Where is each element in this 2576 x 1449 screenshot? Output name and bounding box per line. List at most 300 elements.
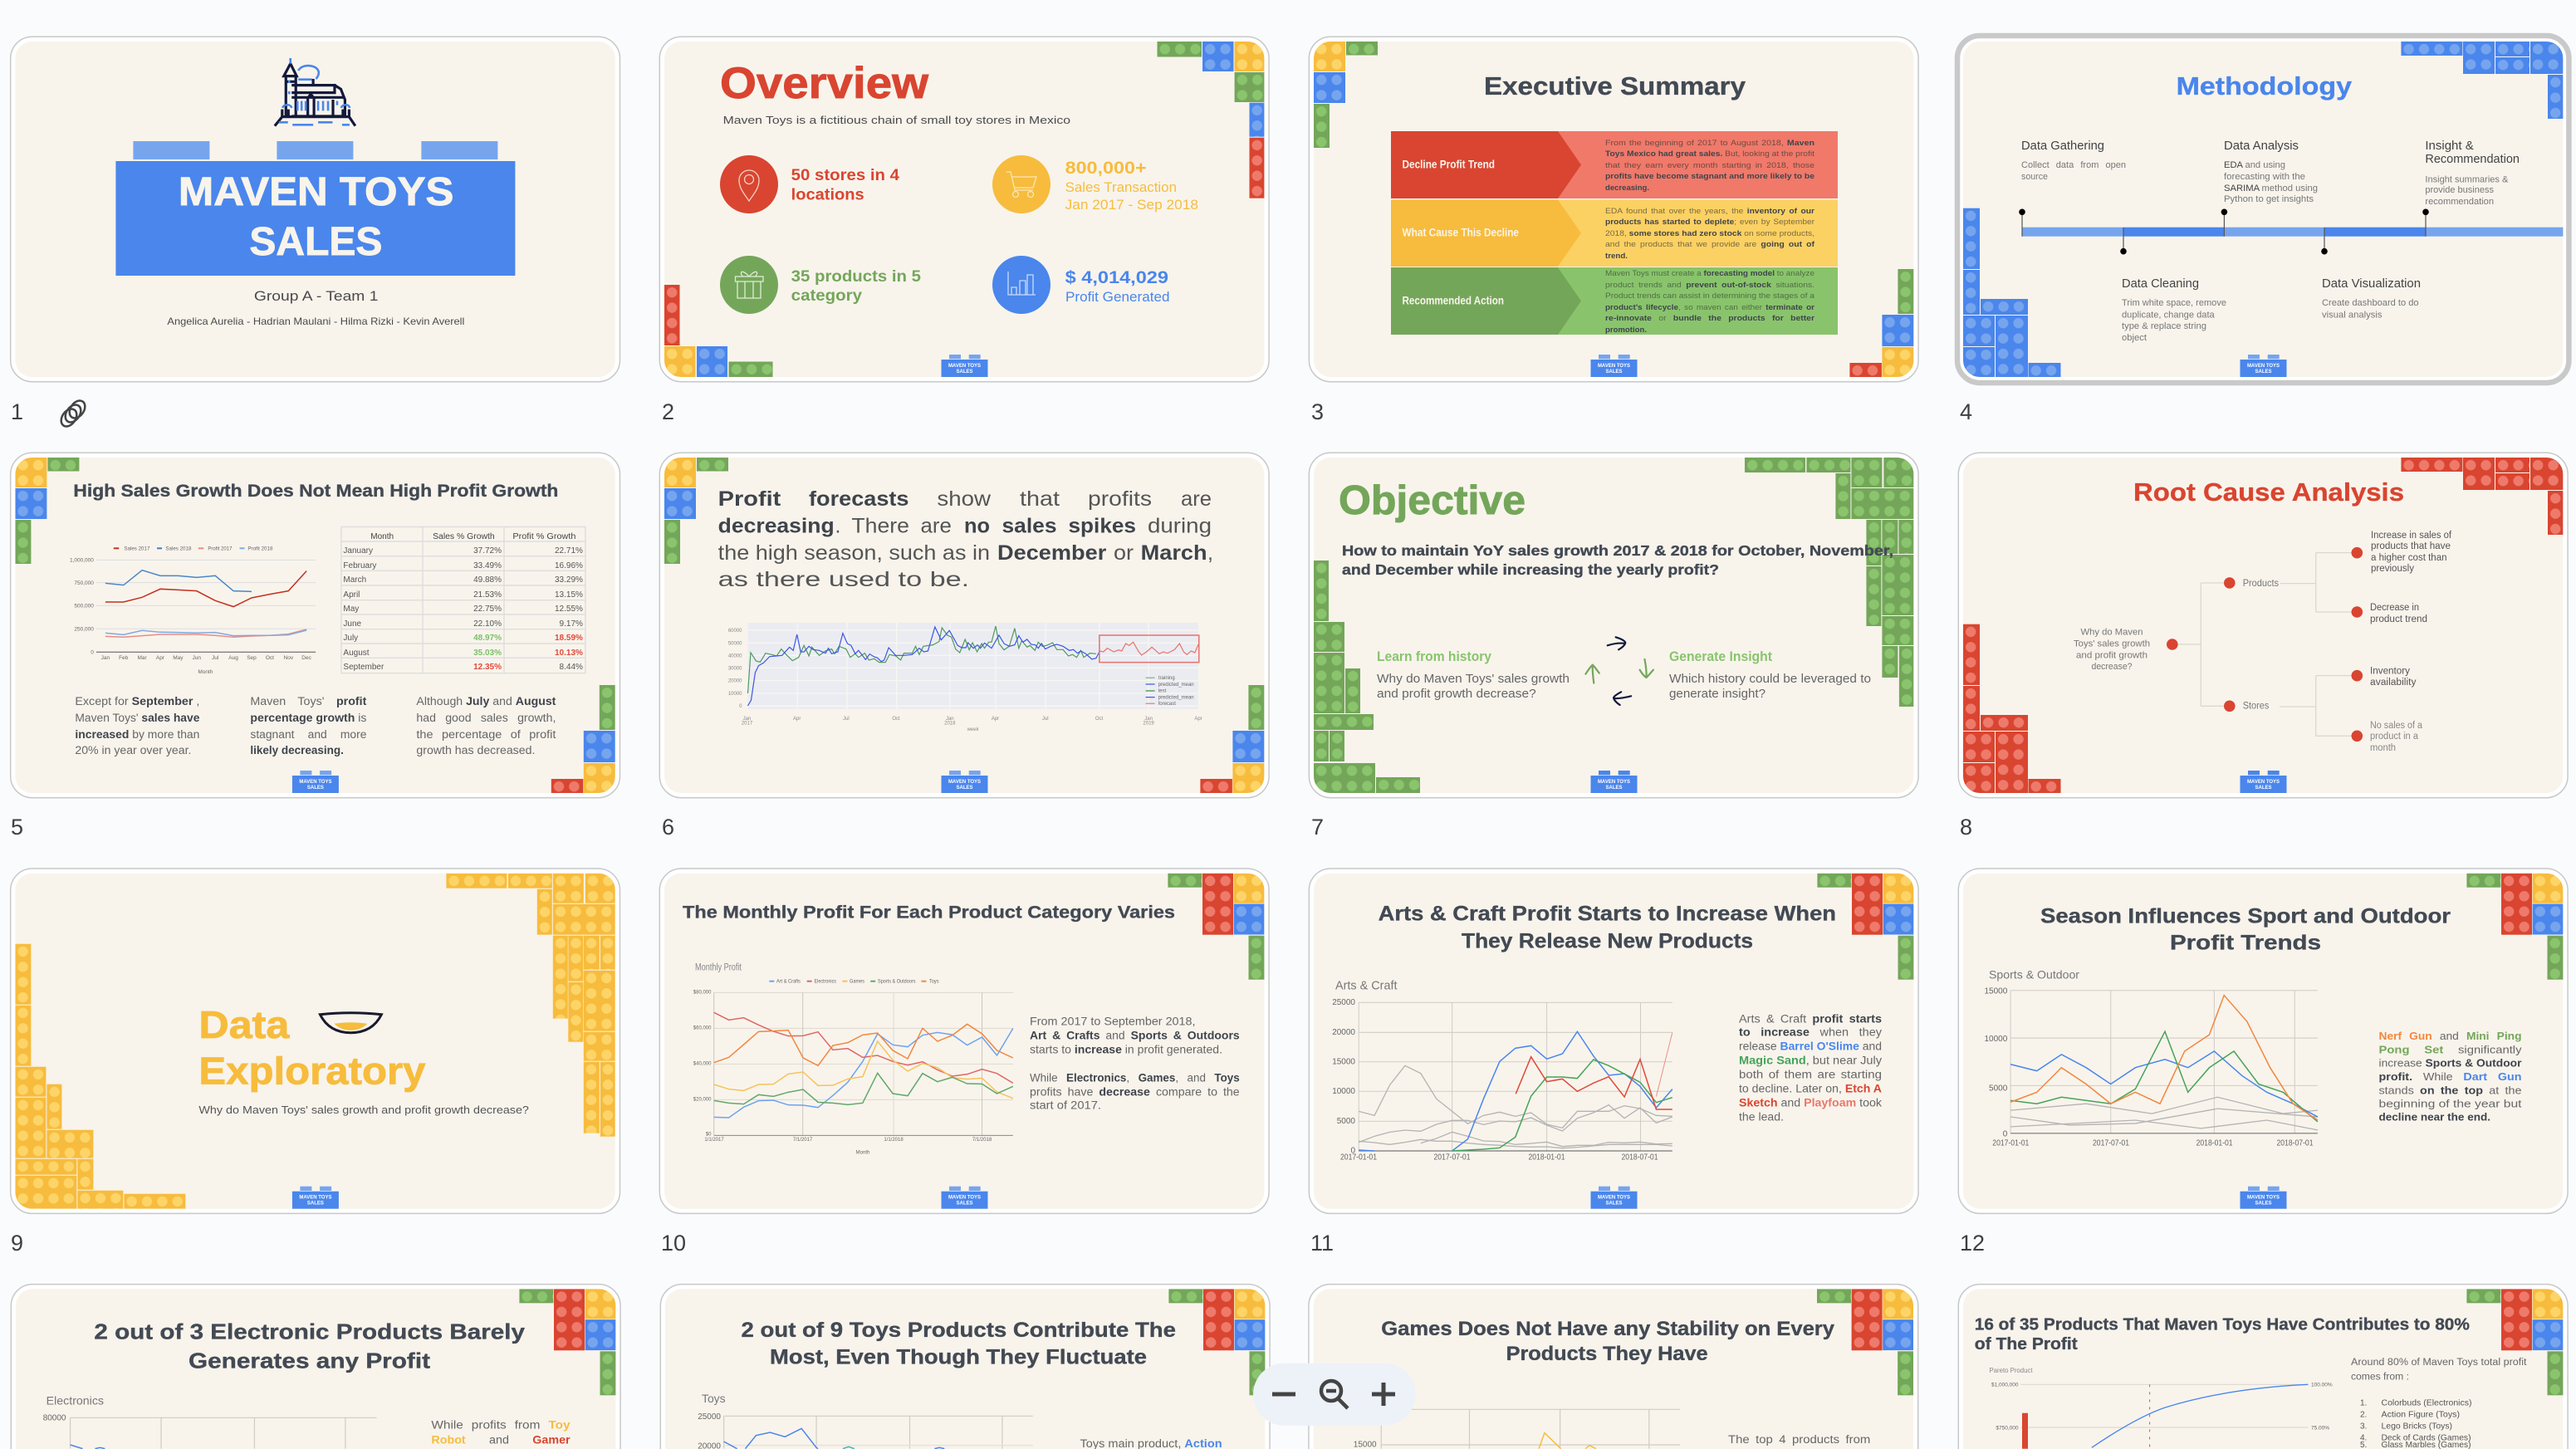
step: data cleaning: Data Cleaning	[2122, 277, 2199, 291]
line chart: sales and profit: Sales 2017	[124, 546, 150, 551]
line chart: games	[1354, 1409, 1680, 1449]
stat: transactions: 800,000+	[1065, 159, 1147, 178]
heading: 16 of 35 Products That Maven Toys Have Contributes to 80%	[1975, 1316, 2470, 1334]
step: data gathering: Data Gathering	[2021, 139, 2104, 153]
headline paragraph: decreasing	[718, 515, 835, 538]
generate insight: generate insight?	[1669, 688, 1765, 701]
line chart: electronics	[43, 1413, 377, 1449]
pareto chart: 75.00%	[2311, 1425, 2329, 1431]
analysis text: beginning of the year but	[2378, 1098, 2522, 1110]
footer logo	[1591, 1187, 1638, 1209]
line chart: arts and craft products: 10000	[1332, 1087, 1355, 1096]
icon: gift	[720, 256, 778, 314]
headline paragraph: spikes	[1068, 515, 1136, 538]
subtitle: Group A - Team 1	[254, 288, 378, 304]
line chart: sales and profit: Month	[198, 669, 213, 675]
slide numbers: 11	[1310, 1231, 1334, 1256]
panel: slide 2 overview	[659, 37, 1269, 382]
icon: location pin	[720, 155, 778, 213]
growth table: June	[343, 619, 362, 629]
analysis text	[1030, 1015, 1240, 1112]
headline paragraph: during	[1148, 515, 1212, 538]
footer logo	[2241, 355, 2287, 377]
analysis text: From 2017 to September 2018,	[1030, 1015, 1196, 1028]
branch labels: Stores	[2243, 700, 2269, 712]
step: data cleaning: type & replace string	[2122, 321, 2206, 331]
panel: slide 14 toys	[660, 1285, 1270, 1449]
pareto chart: $1,000,000	[1991, 1382, 2019, 1388]
row: recommended action: product's lifecycle , so maven can either terminate or	[1605, 303, 1814, 312]
leaf: products	[2370, 531, 2452, 624]
line chart: sales and profit: Jul	[212, 655, 219, 661]
intro text: Maven Toys is a fictitious chain of small toy stores in Mexico	[723, 114, 1070, 126]
panel: slide 12 sports and outdoor	[1958, 869, 2568, 1213]
growth table: 22.10%	[473, 619, 502, 629]
analysis text: Arts & Craft profit starts	[1739, 1013, 1882, 1026]
row: decline profit trend: Decline Profit Trend	[1402, 158, 1495, 171]
footer logo: MAVEN TOYS	[1598, 1196, 1630, 1201]
title brick: MAVEN TOYS	[179, 170, 453, 214]
icon: bar chart	[992, 256, 1050, 314]
lego bricks	[2466, 1289, 2563, 1395]
text column 2: stagnant and more	[250, 728, 366, 741]
headline paragraph: show	[937, 487, 992, 511]
zoom control pill	[1253, 1363, 1415, 1426]
lego bricks	[664, 458, 1264, 793]
footer logo: SALES	[956, 370, 973, 374]
growth table: 16.96%	[555, 561, 583, 570]
slide numbers: 4	[1960, 399, 1972, 424]
root question: Toys' sales growth	[2074, 639, 2150, 649]
analysis text	[1739, 1013, 1882, 1123]
line chart: sales and profit: 500,000	[74, 603, 94, 609]
step: data cleaning: object	[2122, 333, 2147, 343]
analysis text	[431, 1419, 571, 1446]
row: recommended action	[1391, 267, 1838, 335]
growth table: Sales % Growth	[433, 532, 495, 541]
line chart: sales and profit: Aug	[228, 655, 238, 661]
root question: decrease?	[2091, 662, 2133, 672]
footer logo: MAVEN TOYS	[299, 1196, 331, 1201]
stat: profit: $ 4,014,029	[1065, 268, 1168, 287]
headline paragraph: March	[1141, 541, 1207, 565]
headline paragraph: as there used to be.	[718, 568, 969, 591]
generate insight: Which history could be leveraged to	[1669, 673, 1871, 686]
heading: Season Influences Sport and Outdoor	[2040, 905, 2451, 928]
line chart: arts and craft products: 2017-07-01	[1433, 1153, 1471, 1163]
top products list: 4.	[2360, 1434, 2367, 1443]
stat: products: 35 products in 5	[791, 268, 921, 286]
line chart: sales and profit: Jan	[101, 655, 110, 661]
root question: Why do Maven	[2081, 628, 2143, 638]
heading: of The Profit	[1975, 1335, 2078, 1354]
heading: Executive Summary	[1484, 71, 1746, 100]
footer logo	[292, 771, 339, 793]
logo brick tabs	[133, 141, 497, 159]
pareto chart: 100.00%	[2311, 1382, 2333, 1388]
step: data visualization: Data Visualization	[2322, 277, 2421, 291]
line chart: arts and craft products: 25000	[1332, 998, 1355, 1007]
stat: transactions: Sales Transaction	[1065, 179, 1177, 195]
step: data visualization: Create dashboard to do	[2322, 298, 2419, 308]
step: data visualization	[2322, 277, 2421, 321]
text column 1	[75, 695, 200, 756]
step: data cleaning	[2122, 277, 2226, 343]
lego bricks	[15, 458, 615, 793]
growth table: 48.97%	[473, 634, 502, 643]
stat: stores: locations	[791, 187, 864, 204]
leaf: stores: No sales of a	[2370, 721, 2423, 731]
footer logo	[942, 355, 988, 377]
heading: Games Does Not Have any Stability on Every	[1381, 1318, 1835, 1340]
pareto chart	[1991, 1382, 2333, 1449]
panel: slide 11 arts and craft	[1309, 869, 1918, 1213]
analysis text: increase Sports & Outdoor	[2378, 1057, 2521, 1070]
growth table: 37.72%	[473, 546, 502, 556]
headline paragraph: Profit	[718, 487, 781, 511]
heading: Generates any Profit	[189, 1348, 430, 1373]
root question	[2074, 628, 2150, 672]
growth table: 49.88%	[473, 575, 502, 585]
forecast line chart: 40000	[728, 654, 742, 659]
line chart: toys: 25000	[698, 1412, 721, 1422]
objective question	[1342, 542, 1893, 578]
growth table: 12.55%	[555, 605, 583, 614]
slide numbers: 7	[1311, 815, 1324, 840]
forecast line chart: forecast	[1158, 702, 1176, 707]
icon: plus	[1372, 1383, 1395, 1406]
analysis text: to increase when they	[1739, 1026, 1882, 1039]
slide numbers: 8	[1960, 815, 1972, 840]
row: what cause this decline: and the products that we provide are going out of	[1605, 240, 1815, 249]
step: insight and recommendation: provide business	[2425, 185, 2494, 195]
footer logo: SALES	[2255, 370, 2272, 374]
row: recommended action: Product trends can assist in determining the stages of a	[1605, 291, 1815, 301]
lego bricks	[2466, 874, 2563, 980]
leaf: products: product trend	[2370, 614, 2427, 624]
row: recommended action: product trends and prevent out-of-stock situations.	[1605, 281, 1814, 290]
forecast line chart: week	[967, 727, 980, 732]
row: decline profit trend: Toys Mexico had great sales. But, looking at the profit	[1605, 149, 1814, 159]
panel: slide 5 sales vs profit growth	[11, 453, 620, 798]
line chart: sports and outdoor products: 2017-07-01	[2093, 1139, 2129, 1148]
lego bricks	[519, 1289, 616, 1395]
slide numbers	[11, 399, 1985, 1256]
leaf: stores	[2370, 667, 2423, 753]
slide numbers: 5	[11, 815, 23, 840]
multi-line chart: category profit: $40,000	[693, 1062, 712, 1067]
growth table: 22.75%	[473, 605, 502, 614]
forecast line chart: 60000	[728, 629, 742, 634]
forecast line chart: 2019	[1143, 721, 1154, 726]
line chart: sales and profit: Sales 2018	[165, 546, 192, 551]
line chart: sales and profit: Nov	[284, 655, 294, 661]
step: data analysis: EDA and using	[2224, 160, 2285, 170]
heading: 2 out of 9 Toys Products Contribute The	[741, 1319, 1176, 1342]
chart title: Sports & Outdoor	[1989, 968, 2079, 982]
growth table	[340, 526, 585, 673]
forecast line chart: Jan	[946, 717, 954, 722]
headline paragraph	[718, 487, 1213, 591]
branch labels: Products	[2243, 577, 2279, 589]
slide numbers: 6	[662, 815, 674, 840]
top products list: 2.	[2360, 1411, 2367, 1420]
growth table: March	[343, 575, 366, 585]
footer logo	[1591, 771, 1638, 793]
leaf: stores: availability	[2370, 678, 2417, 688]
text column 1: 20% in year over year.	[75, 744, 191, 756]
heading: They Release New Products	[1462, 930, 1753, 953]
forecast line chart: Apr	[992, 717, 999, 722]
line chart: arts and craft products: 0	[1350, 1147, 1355, 1156]
heading: Products They Have	[1506, 1343, 1708, 1365]
multi-line chart: category profit: $0	[706, 1133, 712, 1138]
growth table: 10.13%	[555, 649, 583, 658]
row: decline profit trend: that they earn every month starting in 2018, those	[1605, 161, 1814, 170]
heading: Data	[198, 1003, 290, 1046]
row: decline profit trend: profits have become stagnant and more likely to be	[1605, 172, 1814, 181]
panel: slide 16 pareto	[1958, 1285, 2568, 1449]
line chart: sales and profit: Feb	[119, 655, 129, 661]
growth table: Profit % Growth	[512, 532, 575, 541]
forecast line chart: Jul	[843, 717, 850, 722]
row: what cause this decline: EDA found that over the years, the inventory of our	[1605, 207, 1814, 216]
footer logo: MAVEN TOYS	[2247, 780, 2280, 785]
multi-line chart: category profit: $20,000	[693, 1098, 712, 1103]
slide numbers: 9	[11, 1231, 23, 1256]
step: data visualization: visual analysis	[2322, 311, 2383, 321]
line chart: sales and profit	[70, 546, 316, 675]
leaf: products: Decrease in	[2370, 603, 2419, 613]
footer logo	[292, 1187, 339, 1209]
headline paragraph: .	[835, 515, 840, 538]
row: decline profit trend	[1391, 131, 1838, 198]
growth table: 33.29%	[555, 575, 583, 585]
growth table: 22.71%	[555, 546, 583, 556]
footer logo: SALES	[2255, 1202, 2272, 1207]
text column 3: growth has decreased.	[416, 744, 535, 756]
footer logo: SALES	[2255, 786, 2272, 791]
row: recommended action: Recommended Action	[1402, 294, 1504, 307]
line chart: arts and craft products: 2018-07-01	[1621, 1153, 1658, 1163]
step: insight and recommendation: Recommendation	[2425, 152, 2520, 166]
stat: stores	[791, 167, 899, 204]
analysis text: Robot and Gamer	[431, 1433, 571, 1446]
headline paragraph: are	[920, 515, 952, 538]
row: what cause this decline	[1391, 199, 1838, 267]
pareto intro text: Around 80% of Maven Toys total profit	[2351, 1358, 2527, 1368]
heading: Profit Trends	[2170, 931, 2321, 954]
text column 3: had good sales growth,	[416, 712, 556, 724]
panel: slide 6 profit forecast	[659, 453, 1269, 798]
forecast line chart: 10000	[728, 692, 742, 697]
growth table: 18.59%	[555, 634, 583, 643]
step: data gathering: Collect data from open	[2021, 160, 2126, 170]
slide numbers: 12	[1960, 1231, 1985, 1256]
panel: slide 4 methodology	[1957, 36, 2569, 383]
analysis text: Pong Set significantly	[2378, 1044, 2522, 1056]
line chart: sports and outdoor products: 2018-01-01	[2196, 1139, 2233, 1148]
footer logo: MAVEN TOYS	[2247, 364, 2280, 369]
step: data analysis: forecasting with the	[2224, 172, 2305, 182]
growth table: 13.15%	[555, 590, 583, 600]
row: what cause this decline: trend.	[1605, 252, 1628, 261]
heading: The Monthly Profit For Each Product Category Varies	[683, 903, 1175, 923]
analysis text: the lead.	[1739, 1110, 1784, 1123]
analysis text: release Barrel O'Slime and	[1739, 1040, 1882, 1053]
multi-line chart: category profit: Sports & Outdoors	[878, 980, 915, 985]
heading	[1975, 1316, 2470, 1354]
forecast line chart: Oct	[1095, 717, 1103, 722]
step: data cleaning: duplicate, change data	[2122, 311, 2216, 321]
line chart: sports and outdoor products: 2018-07-01	[2277, 1139, 2314, 1148]
pareto intro text: comes from :	[2351, 1373, 2409, 1383]
analysis text: profits have decrease compare to the	[1030, 1085, 1240, 1099]
text column 2: likely decreasing.	[250, 744, 344, 756]
step: insight and recommendation: Insight &	[2425, 139, 2474, 153]
stat: products	[791, 268, 921, 305]
footer logo	[942, 1187, 988, 1209]
growth table: August	[343, 649, 370, 658]
generate insight: Generate Insight	[1669, 649, 1772, 664]
forecast line chart: Jul	[1042, 717, 1049, 722]
top products list: Action Figure (Toys)	[2382, 1411, 2460, 1420]
chart title: Arts & Craft	[1335, 980, 1397, 993]
growth table: April	[343, 590, 360, 600]
lego bricks	[1314, 42, 1913, 377]
top products list	[2360, 1399, 2471, 1449]
multi-line chart: category profit: Art & Crafts	[776, 980, 801, 985]
text column 3: the percentage of profit	[416, 728, 556, 741]
icon: smile	[320, 1013, 381, 1033]
title brick: SALES	[249, 220, 382, 264]
step: data analysis	[2224, 139, 2318, 204]
heading: Exploratory	[198, 1050, 426, 1093]
headline paragraph: ,	[1207, 541, 1213, 565]
leaf: products: previously	[2371, 564, 2414, 574]
headline paragraph: forecasts	[809, 487, 908, 511]
multi-line chart: category profit: Month	[856, 1150, 869, 1155]
heading: Root Cause Analysis	[2133, 477, 2404, 507]
text column 2: Maven Toys' profit	[250, 695, 367, 707]
headline paragraph: that	[1020, 487, 1060, 511]
line chart: sports and outdoor products: 15000	[1984, 987, 2008, 996]
heading: Methodology	[2177, 71, 2353, 100]
analysis text: Art & Crafts and Sports & Outdoors	[1030, 1029, 1240, 1042]
headline paragraph: profits	[1088, 487, 1152, 511]
footer logo	[942, 771, 988, 793]
lego bricks	[664, 42, 1265, 377]
icon: linked rings	[58, 398, 88, 429]
step: insight and recommendation: recommendation	[2425, 197, 2494, 207]
step: data gathering: source	[2021, 172, 2048, 182]
footer logo: SALES	[307, 1202, 324, 1207]
footer logo: SALES	[1605, 786, 1623, 791]
icon: shopping cart	[992, 155, 1050, 213]
generate insight	[1669, 649, 1871, 701]
panel: slide 9 data exploratory	[11, 869, 620, 1213]
line chart: sales and profit: Mar	[137, 655, 148, 661]
row: what cause this decline: products has started to deplete ; even by September	[1605, 218, 1814, 227]
footer logo: SALES	[1605, 1202, 1623, 1207]
analysis text: Nerf Gun and Mini Ping	[2378, 1030, 2522, 1042]
heading	[2040, 905, 2451, 954]
leaf: products: products that have	[2371, 541, 2451, 551]
line chart: sales and profit: Profit 2018	[247, 546, 273, 551]
line chart: sales and profit: 1,000,000	[70, 558, 94, 563]
forecast line chart: Oct	[892, 717, 900, 722]
footer logo: SALES	[307, 786, 324, 791]
forecast line chart: predicted_mean	[1158, 683, 1194, 688]
line chart: sales and profit: Profit 2017	[208, 546, 233, 551]
forecast line chart: Jan	[743, 717, 751, 722]
chart title: Toys	[702, 1392, 726, 1405]
leaf: stores: product in a	[2370, 732, 2419, 742]
panel: slide 3 executive summary	[1309, 37, 1918, 382]
panel: slide 13 electronics	[11, 1285, 620, 1449]
learn from history: Why do Maven Toys' sales growth	[1377, 673, 1570, 686]
heading: 2 out of 3 Electronic Products Barely	[94, 1319, 526, 1344]
headline paragraph: are	[1181, 487, 1212, 511]
headline paragraph: December	[997, 541, 1107, 565]
footer logo	[1591, 355, 1638, 377]
footer logo: MAVEN TOYS	[299, 780, 331, 785]
step: data gathering	[2021, 139, 2126, 182]
stat: transactions	[1065, 159, 1198, 213]
slide numbers: 10	[661, 1231, 686, 1256]
step: data analysis: Python to get insights	[2224, 194, 2314, 204]
lego bricks	[15, 874, 615, 1209]
row: recommended action: promotion.	[1605, 326, 1647, 335]
line chart: sales and profit: 750,000	[74, 580, 94, 586]
growth table: February	[343, 561, 376, 570]
footer logo	[2241, 1187, 2287, 1209]
line chart: sports and outdoor products: 0	[2003, 1130, 2008, 1139]
line chart: arts and craft products: 20000	[1332, 1028, 1355, 1037]
line chart: arts and craft products	[1332, 998, 1672, 1163]
lego bricks	[1314, 458, 1913, 793]
multi-line chart: category profit: 7/1/2018	[972, 1138, 992, 1143]
footer logo: MAVEN TOYS	[948, 364, 981, 369]
analysis text: decline near the end.	[2378, 1111, 2490, 1123]
headline paragraph: no	[964, 515, 990, 538]
footer logo: MAVEN TOYS	[948, 1196, 981, 1201]
leaf: products: a higher cost than	[2371, 553, 2446, 563]
multi-line chart: category profit: Games	[850, 980, 864, 985]
line chart: sales and profit: May	[173, 655, 184, 661]
line chart: sales and profit: Apr	[156, 655, 165, 661]
analysis text: stands on the top at the	[2378, 1084, 2521, 1096]
analysis text: While Electronics, Games, and Toys	[1030, 1071, 1240, 1084]
heading	[198, 1003, 426, 1093]
row: recommended action: re-innovate or bundle the products for better	[1605, 314, 1814, 323]
stat: transactions: Jan 2017 - Sep 2018	[1065, 197, 1198, 213]
headline paragraph: or	[1114, 541, 1134, 565]
forecast line chart: Apr	[1194, 717, 1202, 722]
step: data analysis: Data Analysis	[2224, 139, 2299, 153]
forecast line chart: training	[1158, 676, 1175, 681]
step: insight and recommendation	[2425, 139, 2520, 207]
line chart: sales and profit: Jun	[193, 655, 201, 661]
line chart: sports and outdoor products: 5000	[1989, 1084, 2008, 1093]
heading: Objective	[1339, 478, 1526, 523]
footer logo: MAVEN TOYS	[2247, 1196, 2280, 1201]
row: what cause this decline: What Cause This Decline	[1402, 226, 1519, 239]
chart title: Pareto Product	[1990, 1366, 2033, 1374]
line chart: arts and craft products: 2018-01-01	[1528, 1153, 1565, 1163]
forecast line chart: predicted_mean	[1158, 696, 1194, 701]
line chart: sales and profit: Dec	[301, 655, 312, 661]
